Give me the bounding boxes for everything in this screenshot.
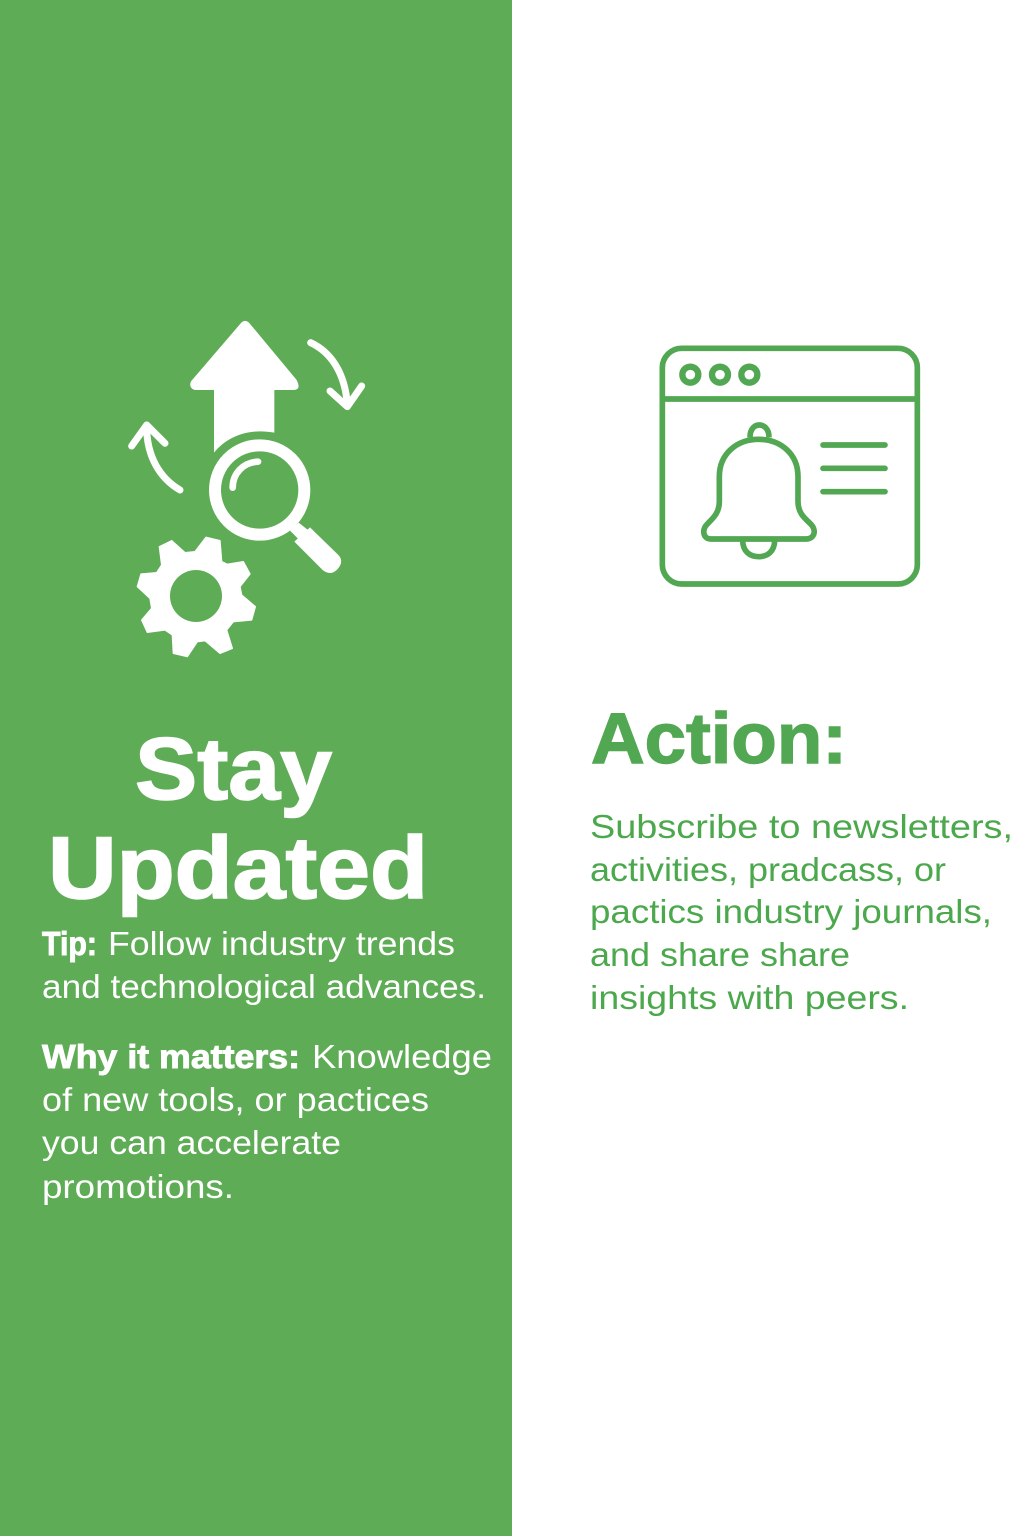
text block: action details: Subscribe to newsletters, (590, 808, 1013, 845)
text block: action details: and share share (590, 936, 850, 973)
text block: why it matters (42, 1038, 492, 1205)
icon: browser window with bell (662, 348, 917, 584)
icon: arrow, magnifier, gear and cycle arrows (132, 321, 362, 657)
panel: right white column (512, 0, 1024, 1536)
icon: clockwise arrow right (311, 343, 362, 407)
text block: why it matters: you can accelerate (42, 1124, 341, 1161)
text lines (823, 445, 885, 492)
icon: gear (137, 537, 255, 657)
text block: action details (590, 808, 1013, 1016)
browser dots (682, 367, 757, 383)
text block: why it matters: promotions. (42, 1168, 234, 1205)
icon: clockwise arrow left (132, 425, 180, 490)
text block: action details: insights with peers. (590, 979, 909, 1016)
text block: tip: Follow industry trends (108, 925, 455, 962)
title: Stay Updated (48, 719, 428, 917)
text block: tip: and technological advances. (42, 968, 486, 1005)
icon: bell (704, 425, 814, 557)
title: Stay Updated: Updated (48, 818, 428, 917)
text block: action details: pactics industry journals, (590, 893, 992, 930)
icon: up arrow (190, 321, 299, 453)
text block: tip (42, 925, 486, 1005)
text block: why it matters: of new tools, or pactices (42, 1081, 429, 1118)
text block: tip: Tip: (42, 925, 97, 962)
text block: action details: activities, pradcass, or (590, 851, 946, 888)
browser frame (662, 348, 917, 584)
text block: why it matters: Why it matters: (42, 1038, 300, 1075)
icon: magnifying glass (215, 445, 341, 573)
text block: why it matters: Knowledge (312, 1038, 492, 1075)
panel: left green column (0, 0, 512, 1536)
title: Stay Updated: Stay (135, 719, 332, 818)
heading: Action: Action: (591, 700, 847, 779)
